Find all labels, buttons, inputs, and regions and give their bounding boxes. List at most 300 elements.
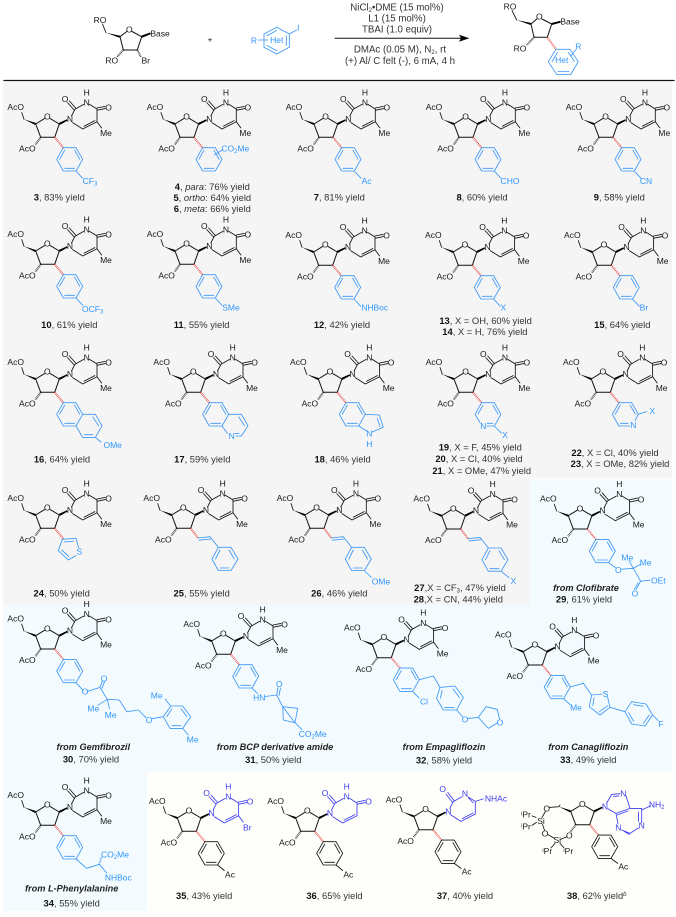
compound 7: O: [383, 103, 390, 113]
compound 29 from Clofibrate: O: [615, 565, 622, 575]
compounds 22, 23: X: [649, 406, 655, 416]
substrate: bromo nucleoside: Base: [150, 28, 170, 38]
compound 30 from Gemfibrozil: O: [82, 687, 89, 697]
product: Het: [555, 55, 569, 65]
source and yield label: 34, 55% yield: [44, 898, 100, 908]
compound 38: Pr: [565, 846, 573, 856]
compound 18: N: [350, 369, 356, 379]
panel: scope of aryl and heteroaryl iodides: [3, 82, 672, 605]
compound 26: O: [331, 485, 338, 495]
compounds 22, 23: N: [639, 352, 645, 362]
compound 29 from Clofibrate: Me: [633, 520, 645, 530]
compound 11: N: [206, 241, 212, 251]
compound 38: NH: [649, 799, 661, 809]
compound 16: OMe: [103, 440, 122, 450]
compound 38: Si: [537, 816, 545, 826]
compound 18: AcO: [290, 357, 307, 367]
compound 34 from L-Phenylalanine: NHBoc: [105, 873, 133, 883]
compound 33 from Canagliflozin: O: [549, 622, 556, 632]
compound 15: H: [640, 215, 646, 225]
compound 12: NHBoc: [361, 303, 389, 313]
compound 11: N: [223, 224, 229, 234]
compound 32 from Empagliflozin: [344, 608, 504, 765]
compound 30 from Gemfibrozil: AcO: [7, 614, 24, 624]
substrate: bromo nucleoside: RO: [94, 15, 107, 25]
compound 18: AcO: [302, 398, 319, 408]
compounds 4, 5, 6: H: [223, 87, 229, 97]
compound 32 from Empagliflozin: O: [398, 614, 405, 624]
compound 24: O: [44, 503, 51, 513]
compound 36: AcO: [267, 796, 284, 806]
compounds 27, 28: Me: [506, 520, 518, 530]
compound 33 from Canagliflozin: N: [555, 642, 561, 652]
compounds 19, 20, 21: Me: [518, 383, 530, 393]
compounds 13, 14: N: [501, 226, 507, 236]
compound 31 from BCP derivative amide: Me: [276, 645, 288, 655]
yield labels: 28,X = CN, 44% yield: [414, 594, 503, 605]
compound 32 from Empagliflozin: Cl: [420, 697, 428, 707]
compound 7: N: [362, 98, 368, 108]
compounds 22, 23: Me: [656, 383, 668, 393]
compound 10: H: [84, 214, 90, 224]
compound 12: N: [345, 242, 351, 252]
source and yield label: [25, 884, 118, 908]
compound 38: i: [563, 848, 565, 854]
compounds 4, 5, 6: Me: [239, 128, 251, 138]
product: [504, 2, 581, 75]
yield label: 9, 58% yield: [594, 192, 645, 202]
reaction conditions above arrow: L1 (15 mol%): [368, 14, 426, 24]
compound 15: AcO: [576, 272, 593, 282]
compound 18: [290, 342, 395, 464]
compound 37: N: [445, 806, 451, 816]
compound 7: O: [340, 94, 347, 104]
compounds 22, 23: AcO: [563, 357, 580, 367]
compound 11: O: [244, 230, 251, 240]
yield labels: 4, para: 76% yield: [175, 181, 250, 192]
compounds 22, 23: AcO: [575, 398, 592, 408]
compounds 4, 5, 6: AcO: [147, 102, 164, 112]
compound 16: N: [84, 352, 90, 362]
compound 29 from Clofibrate: O: [638, 494, 645, 504]
compound 24: N: [84, 488, 90, 498]
yield labels: 19, X = F, 45% yield: [439, 442, 522, 452]
compound 34 from L-Phenylalanine: N: [84, 786, 90, 796]
compounds 19, 20, 21: O: [462, 367, 469, 377]
compound 32 from Empagliflozin: Me: [437, 648, 449, 658]
compound 37: N: [462, 788, 468, 798]
yield label: 3, 83% yield: [34, 192, 85, 202]
product: RO: [514, 43, 527, 53]
compound 9: N: [625, 114, 631, 124]
yield labels: 13, X = OH, 60% yield: [439, 315, 532, 326]
compound 35: Ac: [225, 869, 236, 879]
compound 9: AcO: [566, 102, 583, 112]
compound 35: AcO: [149, 796, 166, 806]
compound 26: N: [353, 488, 359, 498]
compound 17: [153, 342, 258, 464]
compound 3: O: [62, 94, 69, 104]
compound 10: OCF: [82, 304, 100, 314]
compound 3: H: [84, 87, 90, 97]
product: RO: [504, 2, 517, 12]
compounds 19, 20, 21: N: [480, 421, 486, 431]
compound 10: AcO: [19, 270, 36, 280]
source and yield label: from Gemfibrozil: [57, 742, 130, 752]
compound 25: [143, 478, 248, 598]
header divider line: [4, 80, 674, 82]
compound 38: 2: [661, 805, 665, 811]
compounds 13, 14: O: [479, 222, 486, 232]
compound 25: AcO: [143, 493, 160, 503]
yield label: 11, 55% yield: [174, 319, 229, 330]
compound 30 from Gemfibrozil: O: [62, 606, 69, 616]
compound 30 from Gemfibrozil: O: [101, 673, 108, 683]
source and yield label: 32, 58% yield: [416, 754, 472, 765]
yield labels: 27,X = CF: [414, 582, 457, 593]
compound 30 from Gemfibrozil: N: [84, 609, 90, 619]
compound 8: N: [485, 114, 491, 124]
compounds 4, 5, 6: AcO: [158, 144, 175, 154]
compound 10: O: [44, 239, 51, 249]
compound 3: N: [67, 114, 73, 124]
compound 10: N: [84, 224, 90, 234]
compound 25: O: [198, 485, 205, 495]
compound 29 from Clofibrate: [540, 479, 666, 605]
panel: late-stage functionalization of drug derivatives: [3, 479, 672, 911]
aryl iodide: Het: [270, 35, 284, 45]
compound 38: N: [615, 823, 621, 833]
compound 38: Pr: [544, 846, 552, 856]
reaction conditions below arrow: DMAc (0.05 M), N: [354, 44, 431, 56]
compounds 27, 28: O: [450, 503, 457, 513]
compound 3: [7, 87, 112, 202]
compound 29 from Clofibrate: O: [632, 588, 639, 598]
compound 29 from Clofibrate: O: [594, 486, 601, 496]
yield labels: 23, X = OMe, 82% yield: [571, 458, 669, 469]
compound 26: O: [313, 503, 320, 513]
compounds 19, 20, 21: N: [502, 352, 508, 362]
compounds 13, 14: [425, 215, 532, 337]
compound 11: O: [201, 221, 208, 231]
compound 34 from L-Phenylalanine: 2: [114, 855, 118, 861]
reaction conditions below arrow: (+) Al/ C felt (-), 6 mA, 4 h: [345, 56, 455, 67]
compounds 19, 20, 21: [426, 342, 531, 476]
yield labels: [571, 447, 669, 469]
compound 18: N: [366, 428, 372, 438]
compound 16: Me: [100, 383, 112, 393]
compound 24: AcO: [19, 534, 36, 544]
compounds 27, 28: N: [490, 489, 496, 499]
compound 16: [7, 342, 122, 464]
compound 10: 3: [100, 310, 104, 316]
compound 34 from L-Phenylalanine: H: [84, 775, 90, 785]
compound 11: [147, 214, 251, 330]
compound 12: O: [340, 222, 347, 232]
compound 37: O: [439, 784, 446, 794]
compound 38: N: [639, 821, 645, 831]
compound 35: O: [247, 797, 254, 807]
compounds 27, 28: O: [468, 486, 475, 496]
compound 9: O: [620, 94, 627, 104]
compound 9: [566, 87, 670, 202]
compound 12: Me: [378, 256, 390, 266]
yield labels: [414, 582, 506, 605]
compound 7: AcO: [297, 144, 314, 154]
compound 3: O: [105, 103, 112, 113]
compound 35: O: [203, 788, 210, 798]
compound 7: H: [362, 87, 368, 97]
compound 15: N: [624, 242, 630, 252]
compound 32 from Empagliflozin: O: [381, 632, 388, 642]
compound 32 from Empagliflozin: O: [497, 718, 504, 728]
compound 15: O: [601, 240, 608, 250]
compound 29 from Clofibrate: N: [616, 489, 622, 499]
compounds 13, 14: AcO: [437, 272, 454, 282]
compound 15: Me: [657, 256, 669, 266]
compound 29 from Clofibrate: Me: [640, 558, 652, 568]
reaction conditions below arrow: 2: [431, 50, 435, 56]
yield label: 16, 64% yield: [34, 453, 90, 464]
compound 17: Me: [246, 383, 258, 393]
compound 36: Ac: [343, 869, 354, 879]
compound 34 from L-Phenylalanine: [7, 775, 133, 908]
compound 31 from BCP derivative amide: H: [260, 604, 266, 614]
yield label: 24, 50% yield: [34, 588, 90, 598]
compound 11: H: [223, 214, 229, 224]
yield label: 15, 64% yield: [594, 319, 650, 330]
compound 26: OMe: [372, 577, 390, 587]
compound 30 from Gemfibrozil: N: [67, 626, 73, 636]
compound 8: AcO: [426, 102, 443, 112]
compound 38: N: [602, 802, 608, 812]
compound 24: O: [105, 494, 112, 504]
compound 30 from Gemfibrozil: O: [44, 623, 51, 633]
compound 24: [7, 478, 112, 598]
compound 31 from BCP derivative amide: O: [238, 611, 245, 621]
compounds 22, 23: [563, 342, 669, 469]
compound 31 from BCP derivative amide: CO: [299, 729, 311, 739]
compound 29 from Clofibrate: N: [600, 506, 606, 516]
compounds 4, 5, 6: [147, 87, 251, 214]
compound 32 from Empagliflozin: N: [404, 634, 410, 644]
compound 17: O: [251, 358, 258, 368]
compound 9: H: [642, 87, 648, 97]
plus sign: +: [208, 34, 213, 44]
compound 30 from Gemfibrozil: O: [146, 715, 153, 725]
compound 30 from Gemfibrozil: Me: [151, 691, 163, 701]
compounds 27, 28: O: [511, 494, 518, 504]
compound 35: N: [225, 792, 231, 802]
compound 33 from Canagliflozin: S: [603, 689, 609, 699]
reaction conditions above arrow: •DME (15 mol%): [372, 2, 444, 14]
reaction conditions above arrow: [350, 2, 444, 36]
compound 17: H: [230, 342, 236, 352]
compound 26: Me: [369, 519, 381, 529]
source and yield label: [57, 742, 130, 764]
compound 31 from BCP derivative amide: 2: [311, 734, 315, 740]
compound 9: CN: [640, 176, 652, 186]
compound 35: N: [209, 808, 215, 818]
compounds 13, 14: O: [523, 231, 530, 241]
compounds 22, 23: N: [630, 420, 636, 430]
compound 16: O: [105, 358, 112, 368]
compound 16: H: [84, 342, 90, 352]
source and yield label: [403, 742, 486, 765]
yield label: 38, 62% yield: [567, 890, 623, 901]
compounds 22, 23: O: [617, 349, 624, 359]
compound 17: N: [213, 369, 219, 379]
compound 16: O: [62, 349, 69, 359]
compound 31 from BCP derivative amide: N: [260, 614, 266, 624]
yield labels: 22, X = Cl, 40% yield: [571, 447, 659, 458]
compound 10: O: [62, 221, 69, 231]
compound 37: O: [422, 804, 429, 814]
compound 18: H: [366, 439, 372, 449]
compound 17: N: [230, 352, 236, 362]
compounds 13, 14: X: [500, 303, 506, 313]
compounds 22, 23: H: [639, 342, 645, 352]
compound 17: AcO: [165, 398, 182, 408]
yield label: 18, 46% yield: [314, 453, 371, 464]
compound 35: AcO: [161, 838, 178, 848]
compound 31 from BCP derivative amide: Me: [315, 729, 327, 739]
compound 35: Br: [243, 823, 252, 833]
compound 15: AcO: [564, 230, 581, 240]
compound 32 from Empagliflozin: H: [420, 608, 426, 618]
compound 25: O: [180, 503, 187, 513]
panel: nucleobase variation: [147, 772, 672, 915]
compound 36: O: [322, 788, 329, 798]
compound 38: Ac: [618, 862, 629, 872]
compound 32 from Empagliflozin: AcO: [344, 622, 361, 632]
source and yield label: [548, 742, 629, 765]
compound 38: Si: [554, 835, 561, 845]
compound 3: CF: [83, 176, 94, 186]
compound 35: O: [186, 806, 193, 816]
compound 36: O: [304, 806, 311, 816]
compounds 4, 5, 6: 2: [234, 149, 238, 155]
compound 30 from Gemfibrozil: Me: [105, 710, 117, 720]
compound 29 from Clofibrate: AcO: [552, 535, 569, 545]
compounds 13, 14: H: [501, 215, 507, 225]
compound 16: AcO: [19, 398, 36, 408]
compound 33 from Canagliflozin: [495, 615, 664, 765]
compounds 4, 5, 6: O: [201, 94, 208, 104]
compounds 27, 28: AcO: [413, 494, 430, 504]
compound 18: N: [366, 352, 372, 362]
yield labels: 3: [457, 588, 461, 594]
compound 33 from Canagliflozin: AcO: [495, 630, 512, 640]
compound 38: i: [521, 811, 522, 817]
yield label: 37, 40% yield: [437, 890, 493, 901]
compound 36: [267, 781, 372, 901]
compound 34 from L-Phenylalanine: O: [44, 800, 51, 810]
compound 24: S: [76, 547, 82, 557]
compound 31 from BCP derivative amide: [183, 604, 333, 765]
compound 37: [386, 784, 508, 901]
compound 11: O: [183, 239, 190, 249]
compound 31 from BCP derivative amide: AcO: [183, 619, 200, 629]
reaction conditions below arrow: , rt: [435, 44, 446, 56]
compounds 4, 5, 6: N: [206, 114, 212, 124]
source and yield label: 29, 61% yield: [556, 594, 612, 605]
compound 30 from Gemfibrozil: O: [105, 614, 112, 624]
compound 8: O: [462, 112, 469, 122]
compound 10: AcO: [7, 229, 24, 239]
compound 12: AcO: [297, 272, 314, 282]
compounds 19, 20, 21: H: [502, 342, 508, 352]
compound 9: O: [602, 112, 609, 122]
compound 3: AcO: [7, 102, 24, 112]
yield label: 10, 61% yield: [41, 319, 97, 330]
compound 31 from BCP derivative amide: N: [243, 631, 249, 641]
substrate: bromo nucleoside: RO: [105, 56, 118, 66]
compound 30 from Gemfibrozil: AcO: [19, 655, 36, 665]
compound 24: O: [62, 485, 69, 495]
compound 11: Me: [239, 255, 251, 265]
compound 8: Me: [518, 128, 530, 138]
compound 34 from L-Phenylalanine: O: [105, 791, 112, 801]
compound 7: N: [345, 114, 351, 124]
compound 31 from BCP derivative amide: O: [276, 679, 283, 689]
compound 38: i: [542, 848, 544, 854]
compounds 27, 28: X: [510, 576, 516, 586]
compound 31 from BCP derivative amide: O: [281, 620, 288, 630]
yield label: 7, 81% yield: [314, 192, 365, 202]
source and yield label: 33, 49% yield: [560, 754, 616, 765]
yield label: 25, 55% yield: [174, 588, 230, 598]
compounds 19, 20, 21: AcO: [426, 357, 443, 367]
compound 29 from Clofibrate: O: [577, 503, 584, 513]
source and yield label: from Clofibrate: [553, 583, 619, 593]
compound 38: O: [566, 831, 573, 841]
yield labels: [439, 315, 532, 337]
yield labels: 20, X = Cl, 40% yield: [435, 453, 523, 464]
yield label: b: [623, 892, 627, 898]
compound 25: AcO: [155, 534, 172, 544]
compound 34 from L-Phenylalanine: AcO: [7, 790, 24, 800]
source and yield label: from Canagliflozin: [548, 742, 629, 752]
product: R: [575, 42, 581, 52]
compound 34 from L-Phenylalanine: AcO: [19, 832, 36, 842]
compound 12: N: [362, 226, 368, 236]
compounds 4, 5, 6: Me: [237, 144, 250, 154]
compound 35: [149, 781, 254, 901]
compounds 13, 14: N: [485, 242, 491, 252]
compounds 27, 28: AcO: [425, 535, 442, 545]
compound 3: Me: [100, 128, 112, 138]
compound 3: 3: [94, 182, 98, 188]
compound 38: N: [620, 788, 626, 798]
compound 32 from Empagliflozin: AcO: [356, 664, 373, 674]
compound 31 from BCP derivative amide: O: [220, 629, 227, 639]
compounds 27, 28: [413, 479, 518, 605]
compound 38: Pr: [522, 822, 531, 832]
reaction arrow: [335, 35, 469, 42]
compound 26: AcO: [288, 534, 305, 544]
yield labels: [432, 442, 531, 476]
yield label: 12, 42% yield: [314, 319, 370, 330]
compound 33 from Canagliflozin: Me: [588, 656, 600, 666]
compound 38: O: [543, 803, 550, 813]
yield labels: 6, meta: 66% yield: [174, 203, 251, 214]
compound 11: AcO: [158, 270, 175, 280]
compounds 4, 5, 6: N: [223, 98, 229, 108]
compound 37: AcO: [386, 794, 403, 804]
reaction conditions below arrow: [345, 44, 455, 67]
compound 36: N: [344, 792, 350, 802]
